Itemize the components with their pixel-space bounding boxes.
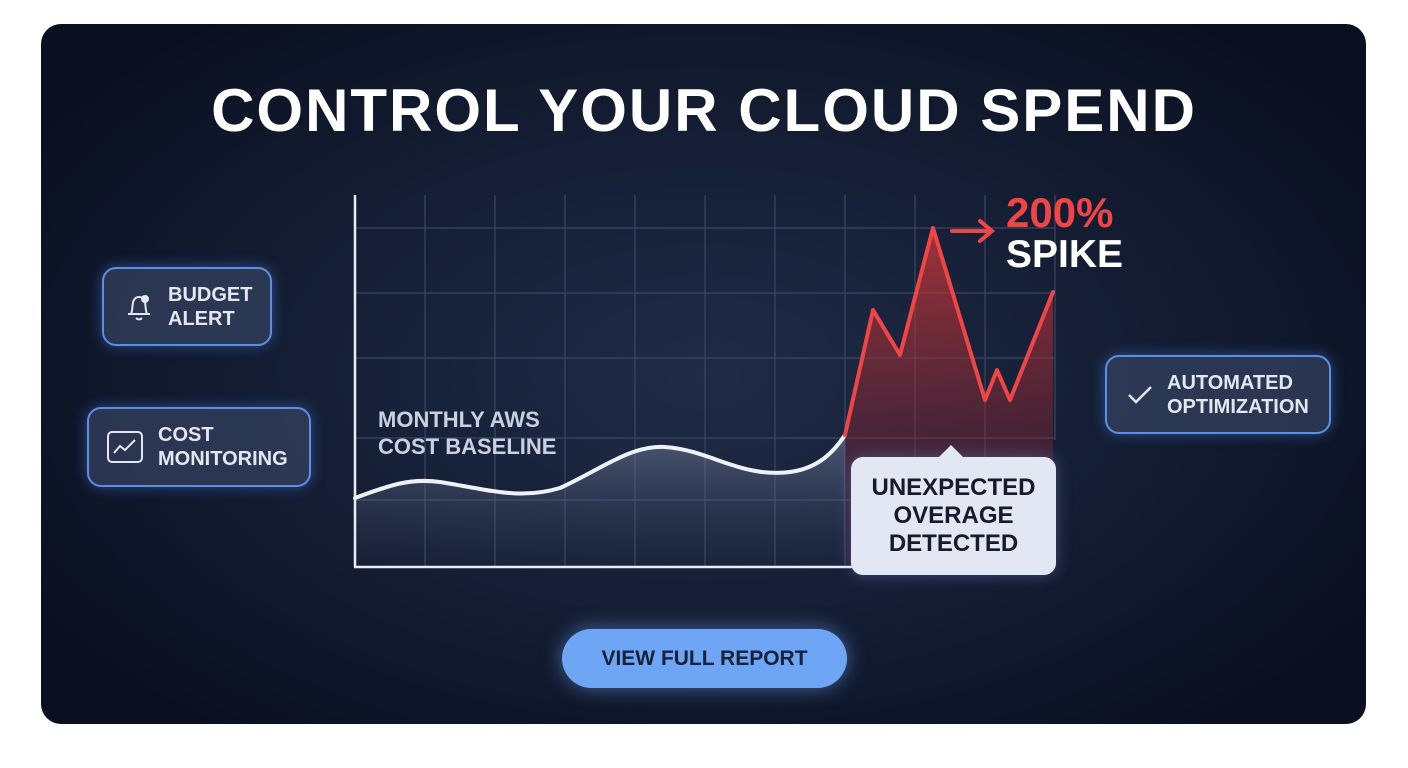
baseline line	[355, 435, 845, 498]
icon: bell	[128, 295, 150, 320]
button: budget alert	[102, 267, 272, 346]
button: budget alert: BUDGET	[168, 284, 252, 306]
button: cost monitoring: COST	[158, 424, 214, 446]
icon: chart	[107, 431, 143, 463]
text: 200% spike: SPIKE	[1006, 233, 1123, 276]
button: view full report	[562, 629, 847, 688]
callout: OVERAGE	[893, 502, 1014, 529]
red area	[845, 228, 1053, 567]
button: cost monitoring: MONITORING	[158, 448, 288, 470]
text: baseline label	[378, 407, 556, 459]
button: automated optimization	[1105, 355, 1331, 434]
button: view full report: VIEW FULL REPORT	[601, 647, 808, 670]
callout: UNEXPECTED	[871, 474, 1036, 501]
arrow	[952, 221, 992, 241]
title: CONTROL YOUR CLOUD SPEND	[211, 77, 1197, 144]
spike line	[845, 228, 1053, 435]
white area	[355, 435, 845, 567]
icon: check	[1128, 386, 1152, 404]
callout: DETECTED	[889, 530, 1018, 557]
button: budget alert: ALERT	[168, 308, 235, 330]
button: cost monitoring	[87, 407, 311, 487]
button: automated optimization: OPTIMIZATION	[1167, 396, 1309, 418]
callout	[851, 457, 1056, 575]
text: 200% spike: 200%	[1006, 189, 1113, 236]
button: automated optimization: AUTOMATED	[1167, 372, 1293, 394]
text: baseline label: COST BASELINE	[378, 434, 556, 459]
text: baseline label: MONTHLY AWS	[378, 407, 540, 432]
text: 200% spike	[1006, 189, 1123, 276]
